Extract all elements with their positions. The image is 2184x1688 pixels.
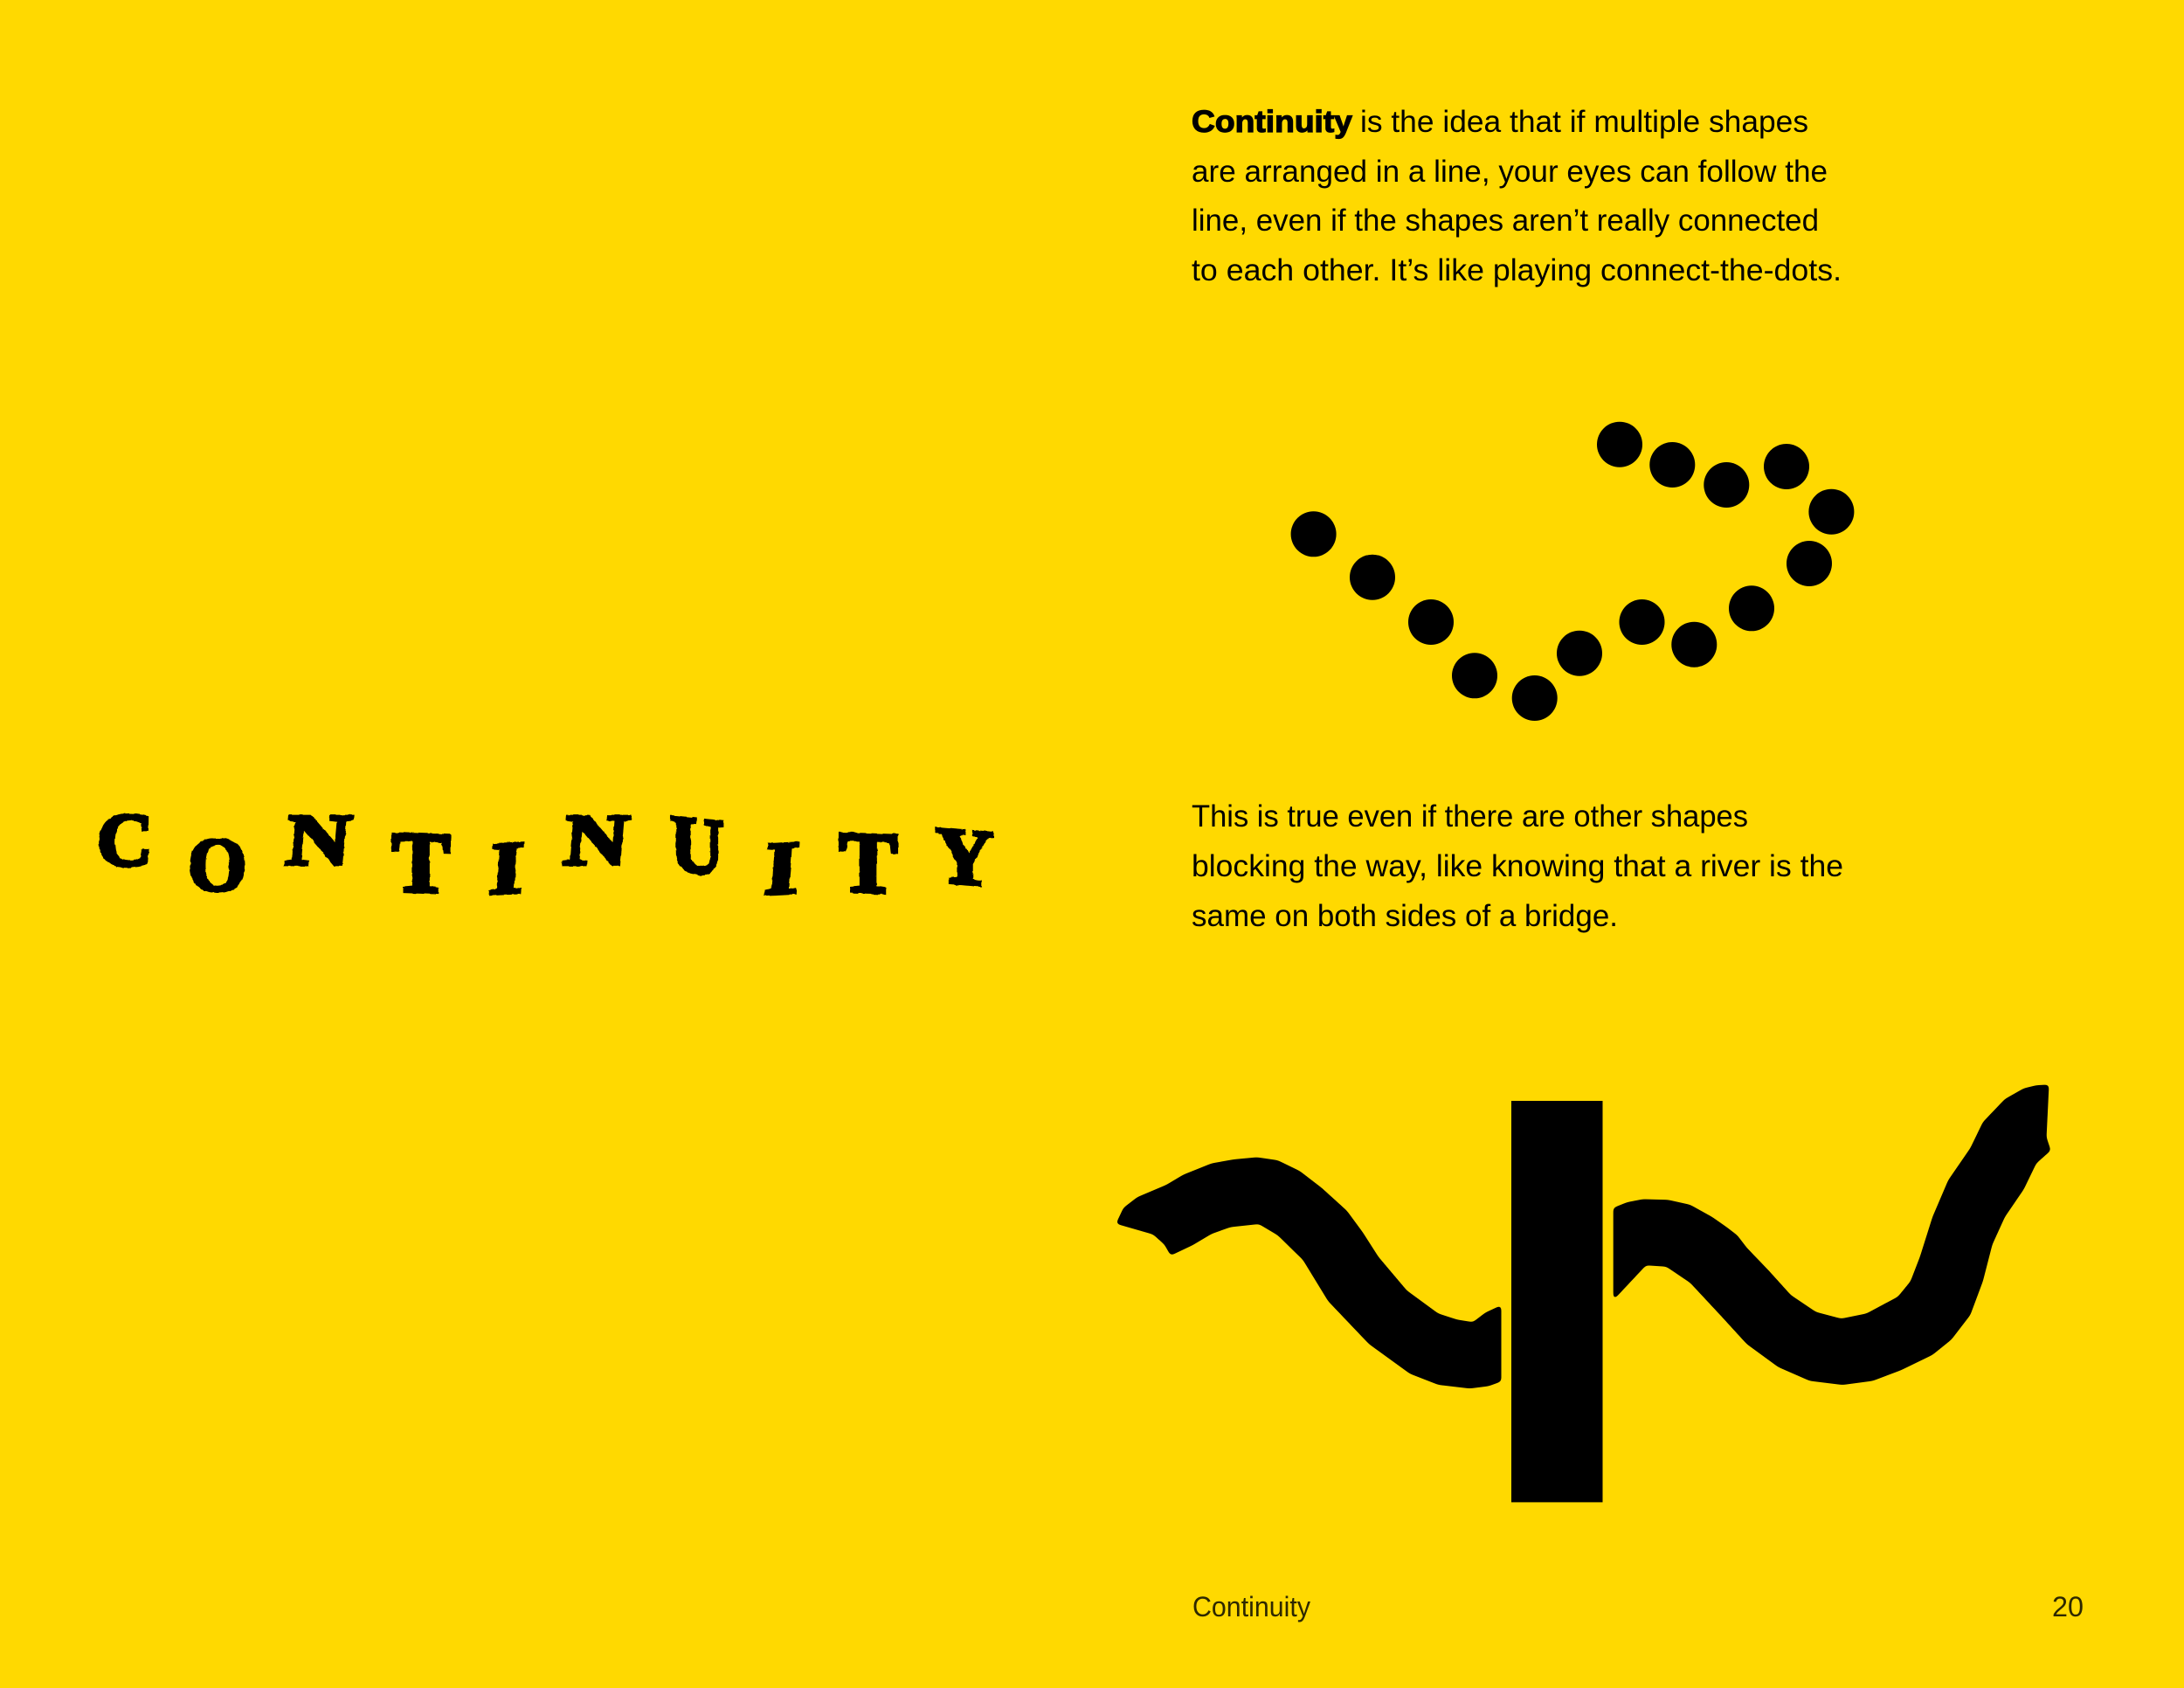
title: scattered CONTINUITY lettering: I [487,827,527,911]
title: scattered CONTINUITY lettering: I [762,827,802,911]
title: scattered CONTINUITY lettering: T [392,813,450,912]
footer: page number: 20 [2052,1591,2084,1622]
text block: definition of continuity: to each other. It’s like playing connect-the-dots. [1192,253,1842,287]
title: scattered CONTINUITY lettering: N [283,800,355,881]
text block: shapes blocking the way: blocking the way, like knowing that a river is the [1192,849,1843,883]
title: scattered CONTINUITY lettering: Y [936,810,993,903]
text block: definition of continuity [1192,105,1842,287]
text block: shapes blocking the way: This is true even if there are other shapes [1192,799,1748,834]
text block: definition of continuity: Continuity [1192,105,1353,139]
illustration: dots arranged along a line [1291,422,1854,721]
text block: definition of continuity: line, even if the shapes aren’t really connected [1192,204,1819,238]
title: scattered CONTINUITY lettering: O [188,822,247,907]
footer: section name: Continuity [1192,1591,1310,1622]
title: scattered CONTINUITY lettering: T [840,813,897,912]
illustration: river passing behind a bridge [1116,1084,2051,1502]
title: scattered CONTINUITY lettering: C [95,799,155,882]
text block: definition of continuity: is the idea that if multiple shapes [1360,105,1808,139]
bridge [1511,1101,1602,1502]
text block: definition of continuity: are arranged in a line, your eyes can follow the [1192,155,1828,189]
title: scattered CONTINUITY lettering [95,799,993,912]
river: right section [1614,1084,2051,1385]
title: scattered CONTINUITY lettering: U [670,799,724,893]
text block: shapes blocking the way: same on both sides of a bridge. [1192,899,1618,933]
river: left section [1116,1157,1501,1388]
text block: shapes blocking the way [1192,799,1843,933]
title: scattered CONTINUITY lettering: N [561,800,632,881]
